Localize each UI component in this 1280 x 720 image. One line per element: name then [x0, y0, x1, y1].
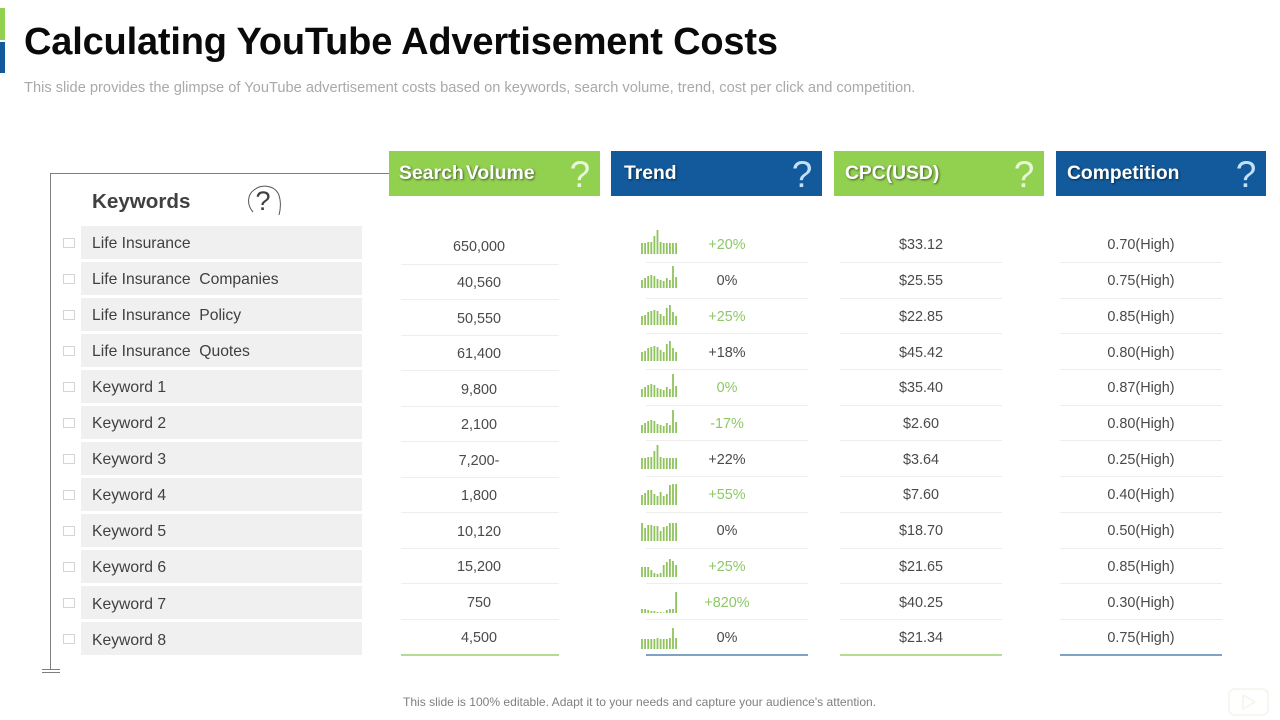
- column: search volume: [453, 239, 505, 646]
- header: search volume: Search Volume: [399, 163, 535, 184]
- keyword row: Keyword 7: [92, 596, 166, 613]
- trend value: 0%: [717, 630, 737, 646]
- subtitle: This slide provides the glimpse of YouTube advertisement costs based on keywords, search volume, trend, cost per click and competition.: [24, 80, 915, 96]
- header: cpc: CPC(USD): [845, 163, 939, 184]
- trend value: +22%: [708, 452, 746, 468]
- keyword row: Keyword 6: [92, 559, 166, 576]
- value: 61,400: [457, 346, 501, 362]
- header: competition: Competition: [1067, 163, 1179, 184]
- sparkline 12: [642, 628, 676, 649]
- value: 9,800: [461, 382, 497, 398]
- header: search volume: [389, 151, 600, 196]
- sparkline 9: [642, 523, 676, 541]
- icon: question circle: ?: [255, 186, 271, 216]
- sparkline 5: [642, 374, 676, 397]
- value: 10,120: [457, 524, 501, 540]
- header: search volume: ?: [570, 154, 590, 195]
- trend value: +820%: [704, 595, 750, 611]
- value: 50,550: [457, 311, 501, 327]
- keyword row: [81, 478, 362, 511]
- value: 1,800: [461, 488, 497, 504]
- trend value: 0%: [717, 380, 737, 396]
- sparkline charts: [641, 230, 677, 649]
- keyword row: Life Insurance: [92, 235, 191, 252]
- icon: question circle: [248, 186, 281, 216]
- sparkline 1: [642, 230, 676, 254]
- trend value: 0%: [717, 523, 737, 539]
- cpc value: $35.40: [899, 380, 943, 396]
- keyword row: [81, 514, 362, 547]
- competition value: 0.75(High): [1107, 273, 1175, 289]
- competition value: 0.87(High): [1107, 380, 1175, 396]
- checkbox: [63, 634, 75, 644]
- panel: keywords: [63, 186, 362, 655]
- keyword row: [81, 370, 362, 403]
- competition value: 0.50(High): [1107, 523, 1175, 539]
- checkbox: [63, 562, 75, 572]
- competition value: 0.30(High): [1107, 595, 1175, 611]
- checkbox: [63, 382, 75, 392]
- value: 40,560: [457, 275, 501, 291]
- sparkline 8: [642, 484, 676, 505]
- title: Calculating YouTube Advertisement Costs: [24, 21, 778, 63]
- checkbox: [63, 490, 75, 500]
- keyword row: Life Insurance Quotes: [92, 343, 250, 360]
- keyword row: [81, 550, 362, 583]
- cpc value: $33.12: [899, 237, 943, 253]
- keyword row: [81, 226, 362, 259]
- column: cpc: [899, 237, 943, 646]
- sparkline 2: [642, 266, 676, 288]
- keyword row: [81, 622, 362, 655]
- header: trend: Trend: [624, 163, 676, 184]
- trend value: +20%: [708, 237, 746, 253]
- keyword row: Keyword 1: [92, 379, 166, 396]
- keyword row: Life Insurance Policy: [92, 307, 241, 324]
- competition value: 0.85(High): [1107, 309, 1175, 325]
- keyword row: Life Insurance Companies: [92, 271, 279, 288]
- sparkline 7: [642, 445, 676, 469]
- header: competition: ?: [1236, 154, 1256, 195]
- sparkline 3: [642, 305, 676, 325]
- checkbox: [63, 310, 75, 320]
- value: 650,000: [453, 239, 505, 255]
- cpc value: $21.65: [899, 559, 943, 575]
- header: trend: [611, 151, 822, 196]
- trend value: 0%: [717, 273, 737, 289]
- column: competition: [1107, 237, 1175, 646]
- cpc value: $18.70: [899, 523, 943, 539]
- keyword row: Keyword 8: [92, 632, 166, 649]
- checkbox: [63, 274, 75, 284]
- value: 750: [467, 595, 491, 611]
- value: 7,200-: [459, 453, 499, 469]
- column: trend: [704, 237, 750, 646]
- value: 2,100: [461, 417, 497, 433]
- header: trend: ?: [792, 154, 812, 195]
- keyword row: Keyword 2: [92, 415, 166, 432]
- competition value: 0.75(High): [1107, 630, 1175, 646]
- checkbox: [63, 598, 75, 608]
- heading: keywords: Keywords: [92, 190, 190, 213]
- competition value: 0.25(High): [1107, 452, 1175, 468]
- cpc value: $3.64: [903, 452, 939, 468]
- keyword row: [81, 406, 362, 439]
- sparkline 10: [642, 559, 676, 577]
- checkbox: [63, 346, 75, 356]
- keyword row: [81, 262, 362, 295]
- cpc value: $21.34: [899, 630, 943, 646]
- header: cpc: ?: [1014, 154, 1034, 195]
- cpc value: $45.42: [899, 345, 943, 361]
- sparkline 4: [642, 341, 676, 361]
- header: competition: [1056, 151, 1266, 196]
- cpc value: $25.55: [899, 273, 943, 289]
- keyword list: [63, 226, 362, 655]
- checkbox: [63, 454, 75, 464]
- trend value: -17%: [710, 416, 744, 432]
- keyword row: [81, 586, 362, 619]
- checkbox: [63, 526, 75, 536]
- trend value: +18%: [708, 345, 746, 361]
- checkbox: [63, 238, 75, 248]
- competition value: 0.70(High): [1107, 237, 1175, 253]
- competition value: 0.80(High): [1107, 345, 1175, 361]
- keyword row: Keyword 3: [92, 451, 166, 468]
- value: 15,200: [457, 559, 501, 575]
- cpc value: $40.25: [899, 595, 943, 611]
- trend value: +55%: [708, 487, 746, 503]
- keyword row: [81, 442, 362, 475]
- header: cpc: [834, 151, 1044, 196]
- bracket connector line: [42, 173, 389, 673]
- accent bar: green: [0, 8, 5, 40]
- icon: play button: [1228, 688, 1269, 716]
- keyword row: Keyword 5: [92, 523, 166, 540]
- cpc value: $22.85: [899, 309, 943, 325]
- sparkline 6: [642, 410, 676, 433]
- cpc value: $7.60: [903, 487, 939, 503]
- trend value: +25%: [708, 309, 746, 325]
- competition value: 0.85(High): [1107, 559, 1175, 575]
- checkbox: [63, 418, 75, 428]
- footer note: This slide is 100% editable. Adapt it to your needs and capture your audience's attention.: [403, 695, 876, 709]
- sparkline 11: [642, 592, 676, 613]
- cpc value: $2.60: [903, 416, 939, 432]
- keyword row: [81, 298, 362, 331]
- competition value: 0.80(High): [1107, 416, 1175, 432]
- competition value: 0.40(High): [1107, 487, 1175, 503]
- trend value: +25%: [708, 559, 746, 575]
- value: 4,500: [461, 630, 497, 646]
- keyword row: Keyword 4: [92, 487, 166, 504]
- accent bar: blue: [0, 42, 5, 73]
- keyword row: [81, 334, 362, 367]
